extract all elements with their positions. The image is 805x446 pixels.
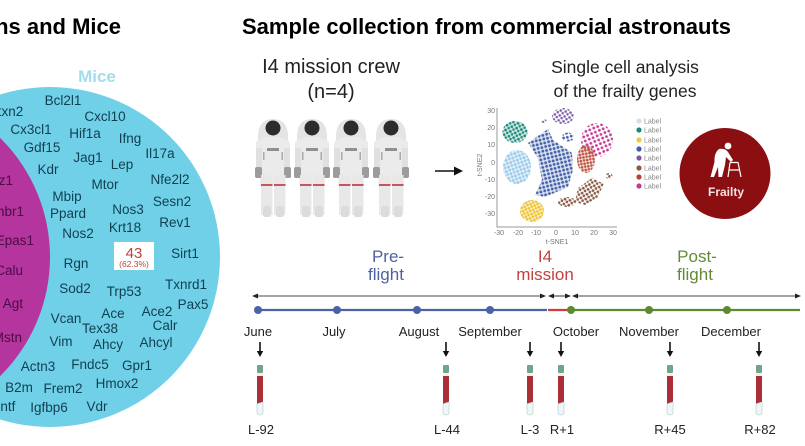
- mice gene labels: Bcl2l1: [45, 93, 81, 108]
- chart: t-SNE scatter: 0: [554, 230, 558, 237]
- axis labels: 0: [491, 160, 495, 167]
- mice gene labels: Ahcy: [93, 337, 123, 352]
- sample day labels: L-92: [248, 422, 274, 437]
- mice gene labels: Mtor: [92, 177, 119, 192]
- blood tubes: [257, 365, 762, 415]
- heading: I4 mission crew: I4 mission crew: [262, 56, 400, 78]
- venn diagram: [0, 67, 220, 427]
- mice gene labels: Vcan: [51, 311, 81, 326]
- month labels: September: [458, 324, 522, 339]
- axis labels: 10: [487, 142, 495, 149]
- mice gene labels: Il17a: [145, 146, 175, 161]
- mice gene labels: Igfbp6: [30, 400, 68, 415]
- timeline: [254, 306, 800, 314]
- legend: Label: [644, 146, 662, 154]
- mice gene labels: Vdr: [86, 399, 108, 414]
- overlap gene labels: Agt: [3, 296, 23, 311]
- phase label: post-flight: [677, 247, 717, 284]
- sample day labels: L-3: [521, 422, 539, 437]
- legend: Label: [644, 128, 662, 134]
- count box: 43: (62.3%): [119, 259, 149, 269]
- phase label: pre-flight: Pre-: [372, 247, 404, 266]
- chart: t-SNE scatter: t-SNE1: [546, 239, 568, 246]
- mice gene labels: Kdr: [37, 162, 59, 177]
- sample day labels: [248, 422, 776, 437]
- arrow: crew to analysis: [435, 166, 463, 176]
- chart: t-SNE scatter: [477, 108, 662, 246]
- mice gene labels: Gdf15: [24, 140, 60, 155]
- icon: frailty badge: [680, 128, 770, 219]
- clusters: [502, 121, 528, 143]
- phase label: post-flight: flight: [677, 265, 713, 284]
- phase label: pre-flight: flight: [368, 265, 404, 284]
- mice gene labels: Nos3: [112, 202, 144, 217]
- mice gene labels: [0, 93, 208, 415]
- mice gene labels: Nfe2l2: [150, 172, 190, 187]
- mice gene labels: Lep: [111, 157, 133, 172]
- count box: 43: 43: [126, 245, 142, 262]
- legend: Label: [644, 184, 662, 190]
- phase label: post-flight: Post-: [677, 247, 717, 266]
- mice circle: [0, 87, 220, 427]
- phase label: I4 mission: I4: [538, 247, 552, 266]
- mice gene labels: Frem2: [43, 381, 83, 396]
- legend: Label: [644, 174, 662, 182]
- heading: single cell analysis: of the frailty genes: [554, 81, 697, 101]
- month labels: November: [619, 324, 680, 339]
- mice gene labels: Gpr1: [122, 358, 152, 373]
- mice gene labels: Sirt1: [171, 246, 199, 261]
- chart: t-SNE scatter: 20: [590, 230, 598, 237]
- mice gene labels: Actn3: [21, 359, 55, 374]
- mice gene labels: Pax5: [178, 297, 208, 312]
- axis labels: -10: [485, 177, 495, 184]
- axis labels: -30: [485, 211, 495, 218]
- icons: four astronauts: [255, 119, 409, 217]
- month labels: December: [701, 324, 762, 339]
- legend: Label: [644, 156, 662, 162]
- chart: t-SNE scatter: 10: [571, 230, 579, 237]
- heading: I4 mission crew: (n=4): [307, 81, 355, 103]
- legend: Label: [644, 166, 662, 172]
- mice gene labels: Sod2: [59, 281, 91, 296]
- frailty label: Frailty: [708, 185, 744, 199]
- mice gene labels: Hmox2: [96, 376, 138, 391]
- axis labels: -20: [485, 194, 495, 201]
- mice gene labels: Tex38: [82, 321, 118, 336]
- phase label: pre-flight: [368, 247, 404, 284]
- phase span arrows: [252, 294, 801, 298]
- mice gene labels: Vim: [49, 334, 73, 349]
- title: sample collection: Sample collection from commercial astronauts: [242, 14, 731, 39]
- chart: t-SNE scatter: -20: [513, 230, 523, 237]
- month labels: [244, 324, 762, 339]
- mice gene labels: Ace: [101, 306, 125, 321]
- sample day labels: R+82: [744, 422, 776, 437]
- mice gene labels: Trp53: [107, 284, 141, 299]
- mice gene labels: Ahcyl: [139, 335, 173, 350]
- legend: [636, 118, 662, 190]
- mice gene labels: Ace2: [142, 304, 172, 319]
- mice gene labels: Krt18: [109, 220, 141, 235]
- phase label: I4 mission: [516, 247, 574, 284]
- month labels: June: [244, 324, 272, 339]
- humans overlap circle: [0, 90, 50, 424]
- mice gene labels: Rgn: [64, 256, 88, 271]
- month labels: July: [322, 324, 346, 339]
- mice gene labels: Calr: [153, 318, 178, 333]
- chart: t-SNE scatter: 30: [609, 230, 617, 237]
- mice gene labels: Sesn2: [153, 194, 191, 209]
- mice gene labels: Jag1: [73, 150, 103, 165]
- mice gene labels: Txnrd1: [165, 277, 207, 292]
- mice gene labels: Cxcl10: [84, 109, 126, 124]
- icon: person with walker: [710, 143, 741, 177]
- month labels: August: [399, 324, 440, 339]
- legend: Label: [644, 118, 662, 126]
- mice gene labels: Ifng: [119, 131, 141, 146]
- heading: I4 mission crew: [262, 56, 400, 103]
- mice gene labels: Cx3cl1: [10, 122, 52, 137]
- axis labels: [485, 108, 495, 218]
- month labels: October: [553, 324, 600, 339]
- mice gene labels: Nos2: [62, 226, 94, 241]
- axis labels: 20: [487, 125, 495, 132]
- legend: Label: [644, 138, 662, 144]
- sample day labels: L-44: [434, 422, 460, 437]
- chart: t-SNE scatter: -30: [494, 230, 504, 237]
- heading: single cell analysis: Single cell analysis: [551, 57, 699, 77]
- mice gene labels: B2m: [5, 380, 33, 395]
- mice gene labels: Hif1a: [69, 126, 101, 141]
- count box: 43: [114, 242, 154, 270]
- phase label: I4 mission: mission: [516, 265, 574, 284]
- mice gene labels: Ppard: [50, 206, 86, 221]
- chart: t-SNE scatter: -10: [531, 230, 541, 237]
- heading: single cell analysis: [551, 57, 699, 101]
- mice gene labels: Rev1: [159, 215, 191, 230]
- sample day labels: R+45: [654, 422, 686, 437]
- mice gene labels: Fndc5: [71, 357, 109, 372]
- chart: t-SNE scatter: t-SNE2: [477, 154, 484, 176]
- overlap gene labels: [0, 173, 34, 345]
- sampling arrows: [257, 342, 762, 357]
- axis labels: 30: [487, 108, 495, 115]
- mice label: Mice: [78, 67, 116, 86]
- mice gene labels: Mbip: [52, 189, 82, 204]
- sample day labels: R+1: [550, 422, 574, 437]
